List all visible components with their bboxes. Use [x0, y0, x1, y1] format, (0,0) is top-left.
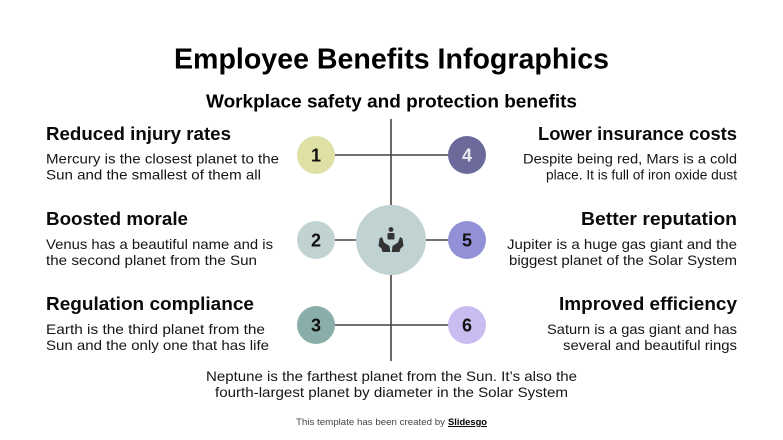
subtitle: Workplace safety and protection benefits [206, 90, 577, 112]
item 3: regulation compliance: Regulation compliance [46, 293, 254, 314]
item 3: regulation compliance: Sun and the only one that has life [46, 337, 269, 353]
item 6: improved efficiency [547, 293, 738, 353]
node 1 [297, 136, 335, 174]
center circle [356, 205, 426, 275]
item 6: improved efficiency: Saturn is a gas giant and has [547, 321, 737, 337]
item 5: better reputation: Better reputation [581, 208, 737, 229]
connector lines [316, 119, 467, 361]
item 6: improved efficiency: several and beautiful rings [563, 337, 737, 353]
node 4 [448, 136, 486, 174]
footer credit: Slidesgo [448, 417, 487, 428]
bottom description: fourth-largest planet by diameter in the Solar System [215, 384, 568, 400]
node 2 [297, 221, 335, 259]
node 4: 4 [462, 146, 472, 166]
item 1: reduced injury rates: Reduced injury rates [46, 123, 231, 144]
node 2: 2 [311, 230, 321, 250]
item 5: better reputation [507, 208, 737, 268]
node 3: 3 [311, 316, 321, 336]
node 5: 5 [462, 230, 472, 250]
item 1: reduced injury rates: Mercury is the closest planet to the [46, 150, 279, 166]
node 6: 6 [462, 316, 472, 336]
item 4: lower insurance costs: Lower insurance costs [538, 123, 737, 144]
node 1: 1 [311, 146, 321, 166]
icon: hands protecting person [378, 227, 404, 252]
diagram [297, 119, 486, 361]
item 1: reduced injury rates [46, 123, 279, 182]
item 2: boosted morale [46, 208, 273, 268]
item 1: reduced injury rates: Sun and the smallest of them all [46, 166, 261, 182]
item 4: lower insurance costs [523, 123, 737, 182]
item 2: boosted morale: Venus has a beautiful name and is [46, 236, 273, 252]
item 4: lower insurance costs: place. It is full of iron oxide dust [546, 166, 737, 182]
item 2: boosted morale: Boosted morale [46, 208, 188, 229]
item 2: boosted morale: the second planet from the Sun [46, 252, 257, 268]
item 5: better reputation: Jupiter is a huge gas giant and the [507, 236, 737, 252]
node 5 [448, 221, 486, 259]
item 4: lower insurance costs: Despite being red, Mars is a cold [523, 150, 737, 166]
footer credit: This template has been created by [296, 417, 445, 428]
bottom description: Neptune is the farthest planet from the Sun. It’s also the [206, 368, 577, 384]
bottom description [206, 368, 577, 400]
item 3: regulation compliance [46, 293, 269, 353]
item 5: better reputation: biggest planet of the Solar System [509, 252, 737, 268]
item 6: improved efficiency: Improved efficiency [559, 293, 738, 314]
item 3: regulation compliance: Earth is the third planet from the [46, 321, 265, 337]
node 6 [448, 306, 486, 344]
node 3 [297, 306, 335, 344]
title: Employee Benefits Infographics [174, 44, 609, 76]
